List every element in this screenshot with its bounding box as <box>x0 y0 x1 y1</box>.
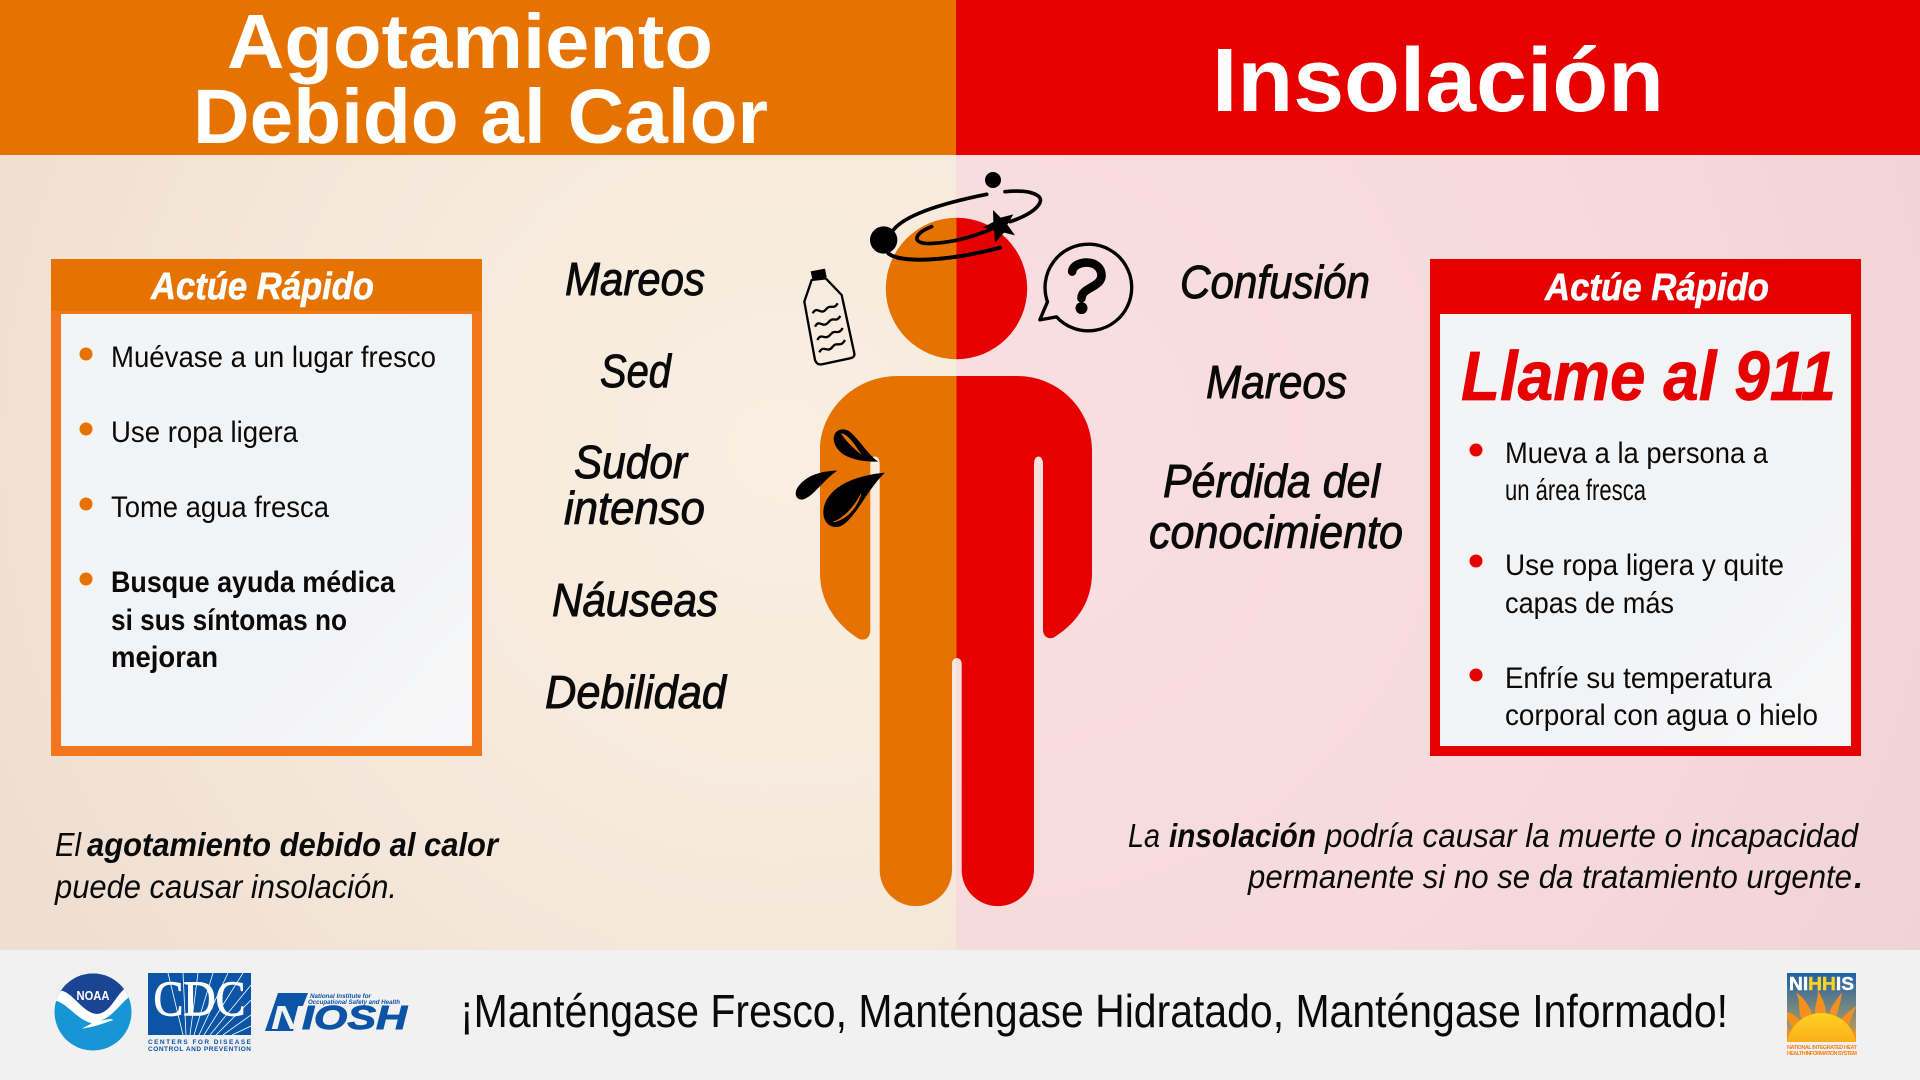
header: heat exhaustion <box>0 0 956 160</box>
note: heat stroke warning: . <box>1854 858 1863 895</box>
figure head <box>886 218 1027 359</box>
icon: question speech bubble <box>1040 244 1132 331</box>
list: heat stroke actions: Enfríe su temperatura <box>1505 662 1773 695</box>
list: heat exhaustion actions: Use ropa ligera <box>111 416 299 449</box>
list: heat exhaustion symptoms: Sudor <box>574 436 689 488</box>
footer band <box>54 973 1857 1055</box>
list: heat stroke actions <box>1470 437 1818 732</box>
heading: Actúe Rápido: Actúe Rápido <box>150 266 374 308</box>
list: heat exhaustion actions: si sus síntomas no <box>111 604 347 637</box>
slogan: ¡Manténgase Fresco, Manténgase Hidratado, Manténgase Informado! <box>460 985 1728 1037</box>
note: exhaustion warning: El <box>55 826 82 863</box>
list: heat exhaustion actions: mejoran <box>111 641 218 674</box>
list: heat stroke symptoms: Pérdida del <box>1163 455 1382 507</box>
panel: heat exhaustion background <box>0 155 956 950</box>
list: heat stroke symptoms <box>1149 256 1403 558</box>
list: heat exhaustion actions <box>80 341 436 674</box>
list: heat exhaustion actions: Muévase a un lugar fresco <box>111 341 436 374</box>
callout: Llame al 911: Llame al 911 <box>1461 337 1836 415</box>
heading: Actúe Rápido: Actúe Rápido <box>1544 267 1769 309</box>
logo: NIOSH: National Institute for <box>310 993 371 1000</box>
list: heat stroke actions: corporal con agua o hielo <box>1505 699 1818 732</box>
list: heat exhaustion actions: Tome agua fresca <box>111 491 330 524</box>
list: heat exhaustion symptoms <box>545 253 727 718</box>
panel: right action box <box>1430 259 1861 756</box>
logo: NIOSH <box>265 993 409 1036</box>
title: Agotamiento Debido al Calor: Debido al Calor <box>193 74 768 160</box>
list: heat exhaustion symptoms: Náuseas <box>552 574 718 626</box>
logo: NIHHIS <box>1787 973 1857 1055</box>
panel: left action box <box>51 259 482 756</box>
list: heat stroke actions: un área fresca <box>1505 474 1646 507</box>
list: heat stroke symptoms: conocimiento <box>1149 506 1403 558</box>
list: heat stroke actions: Mueva a la persona a <box>1505 437 1769 470</box>
list: heat stroke actions: capas de más <box>1505 587 1674 620</box>
icon: water bottle <box>804 269 854 364</box>
note: heat stroke warning: permanente si no se da tratamiento urgente <box>1247 858 1852 895</box>
logo: CDC: CENTERS FOR DISEASE <box>148 1039 252 1046</box>
list: heat stroke actions: Use ropa ligera y quite <box>1505 549 1784 582</box>
note: heat stroke warning: podría causar la muerte o incapacidad <box>1324 817 1860 854</box>
list: heat exhaustion symptoms: intenso <box>564 482 705 534</box>
note: heat stroke warning: insolación <box>1169 817 1316 854</box>
list: heat exhaustion symptoms: Sed <box>600 345 672 397</box>
list: heat exhaustion symptoms: Debilidad <box>545 666 727 718</box>
logo: CDC <box>148 970 252 1053</box>
icon: sweat drops <box>796 429 885 527</box>
list: heat exhaustion symptoms: Mareos <box>565 253 705 305</box>
logo: NIOSH: Occupational Safety and Health <box>308 999 400 1006</box>
logo: CDC: CONTROL AND PREVENTION <box>148 1046 251 1053</box>
title: Insolación: Insolación <box>1212 31 1664 131</box>
note: exhaustion warning: agotamiento debido al calor <box>87 826 500 863</box>
logo: NIHHIS: NIHHIS <box>1789 973 1854 994</box>
logo: NOAA <box>53 972 132 1051</box>
note: heat stroke warning <box>1128 817 1863 895</box>
logo: CDC: CDC <box>154 970 246 1026</box>
list: heat stroke symptoms: Confusión <box>1180 256 1370 308</box>
logo: NIOSH: IOSH <box>302 999 409 1036</box>
figure body <box>820 376 1092 906</box>
list: heat stroke symptoms: Mareos <box>1206 356 1347 408</box>
title: Agotamiento Debido al Calor: Agotamiento <box>227 0 713 85</box>
logo: NIOSH: N <box>271 999 305 1036</box>
list: heat exhaustion actions: Busque ayuda médica <box>111 566 396 599</box>
logo: NIHHIS: NATIONAL INTEGRATED HEAT <box>1787 1045 1858 1051</box>
header: heat stroke <box>956 0 1920 155</box>
logo: NIHHIS: HEALTH INFORMATION SYSTEM <box>1787 1051 1857 1057</box>
panel: heat stroke background <box>956 155 1920 950</box>
logo: NOAA: NOAA <box>76 988 110 1003</box>
human figure split in two colours <box>820 218 1092 906</box>
icon: dizziness orbit <box>870 172 1040 260</box>
note: heat stroke warning: La <box>1128 817 1160 854</box>
note: exhaustion warning: puede causar insolación. <box>54 868 397 905</box>
title: Agotamiento Debido al Calor <box>193 0 768 160</box>
note: exhaustion warning <box>54 826 500 905</box>
